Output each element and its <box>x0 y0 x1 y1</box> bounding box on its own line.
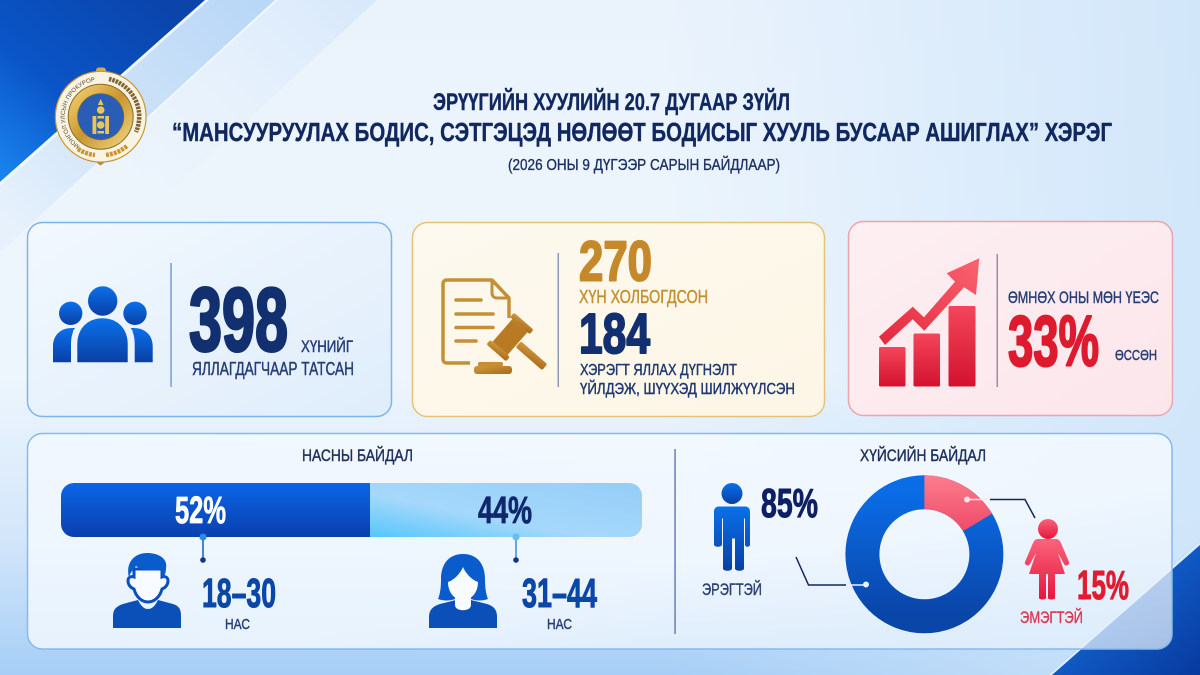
connector: 18-30 <box>200 534 206 563</box>
panel: accused persons <box>28 222 392 416</box>
value: 44%: 44% <box>478 490 532 532</box>
heading: age breakdown: НАСНЫ БАЙДАЛ <box>302 446 413 465</box>
bar chart: age split <box>61 483 642 537</box>
title <box>172 88 1112 147</box>
label: indictment transferred to court <box>580 362 795 398</box>
panel: year over year growth <box>848 222 1172 416</box>
donut chart: gender split <box>862 475 992 616</box>
value: 52%: 52% <box>175 490 226 532</box>
label: persons involved: ХҮН ХОЛБОГДСОН <box>579 287 708 307</box>
icon: male figure <box>714 483 750 571</box>
connector: male share <box>796 557 869 588</box>
icon: woman <box>429 554 497 628</box>
stat: 33%: 33% <box>1008 302 1099 382</box>
label: female: ЭМЭГТЭЙ <box>1020 608 1083 627</box>
value: 15%: 15% <box>1077 562 1129 608</box>
label: people: ХҮНИЙГ <box>301 337 353 356</box>
title: ЭРҮҮГИЙН ХУУЛИЙН 20.7 ДУГААР ЗҮЙЛ <box>433 88 790 116</box>
label: indictment transferred to court: ҮЙЛДЭЖ, ШҮҮХЭД ШИЛЖҮҮЛСЭН <box>580 379 795 398</box>
stat: 270: 270 <box>579 230 652 294</box>
label: drawn in as defendants: ЯЛЛАГДАГЧААР ТАТСАН <box>192 359 354 379</box>
connector: 31-44 <box>512 534 520 563</box>
icon: group of people <box>53 286 153 362</box>
label: age 31-44: 31–44 <box>522 570 597 616</box>
label: age 18-30: 18–30 <box>202 570 276 616</box>
label: increased: ӨССӨН <box>1115 347 1157 364</box>
stat: 398: 398 <box>189 270 288 370</box>
subtitle: date: (2026 ОНЫ 9 ДҮГЭЭР САРЫН БАЙДЛААР) <box>508 155 780 174</box>
icon: rising bar chart with arrow <box>879 258 979 386</box>
icon: young man <box>113 553 181 628</box>
connector: female share <box>964 496 1035 518</box>
panel: persons involved and cases transferred <box>412 222 824 416</box>
label: indictment transferred to court: ХЭРЭГТ ЯЛЛАХ ДҮГНЭЛТ <box>580 362 737 379</box>
icon: female figure <box>1025 519 1069 600</box>
logo ring text: МОНГОЛ УЛСЫН ПРОКУРОР <box>60 77 94 149</box>
label: years: НАС <box>547 616 572 633</box>
value: 85%: 85% <box>761 480 818 526</box>
stat: 184: 184 <box>579 302 650 366</box>
icon: document and gavel <box>443 280 558 383</box>
label: years: НАС <box>225 616 250 633</box>
heading: gender breakdown: ХҮЙСИЙН БАЙДАЛ <box>860 446 986 465</box>
logo: prosecutor emblem <box>54 68 147 166</box>
label: male: ЭРЭГТЭЙ <box>702 580 762 599</box>
panel: age and gender breakdown <box>28 434 1172 649</box>
logo soyombo symbol <box>92 99 109 134</box>
